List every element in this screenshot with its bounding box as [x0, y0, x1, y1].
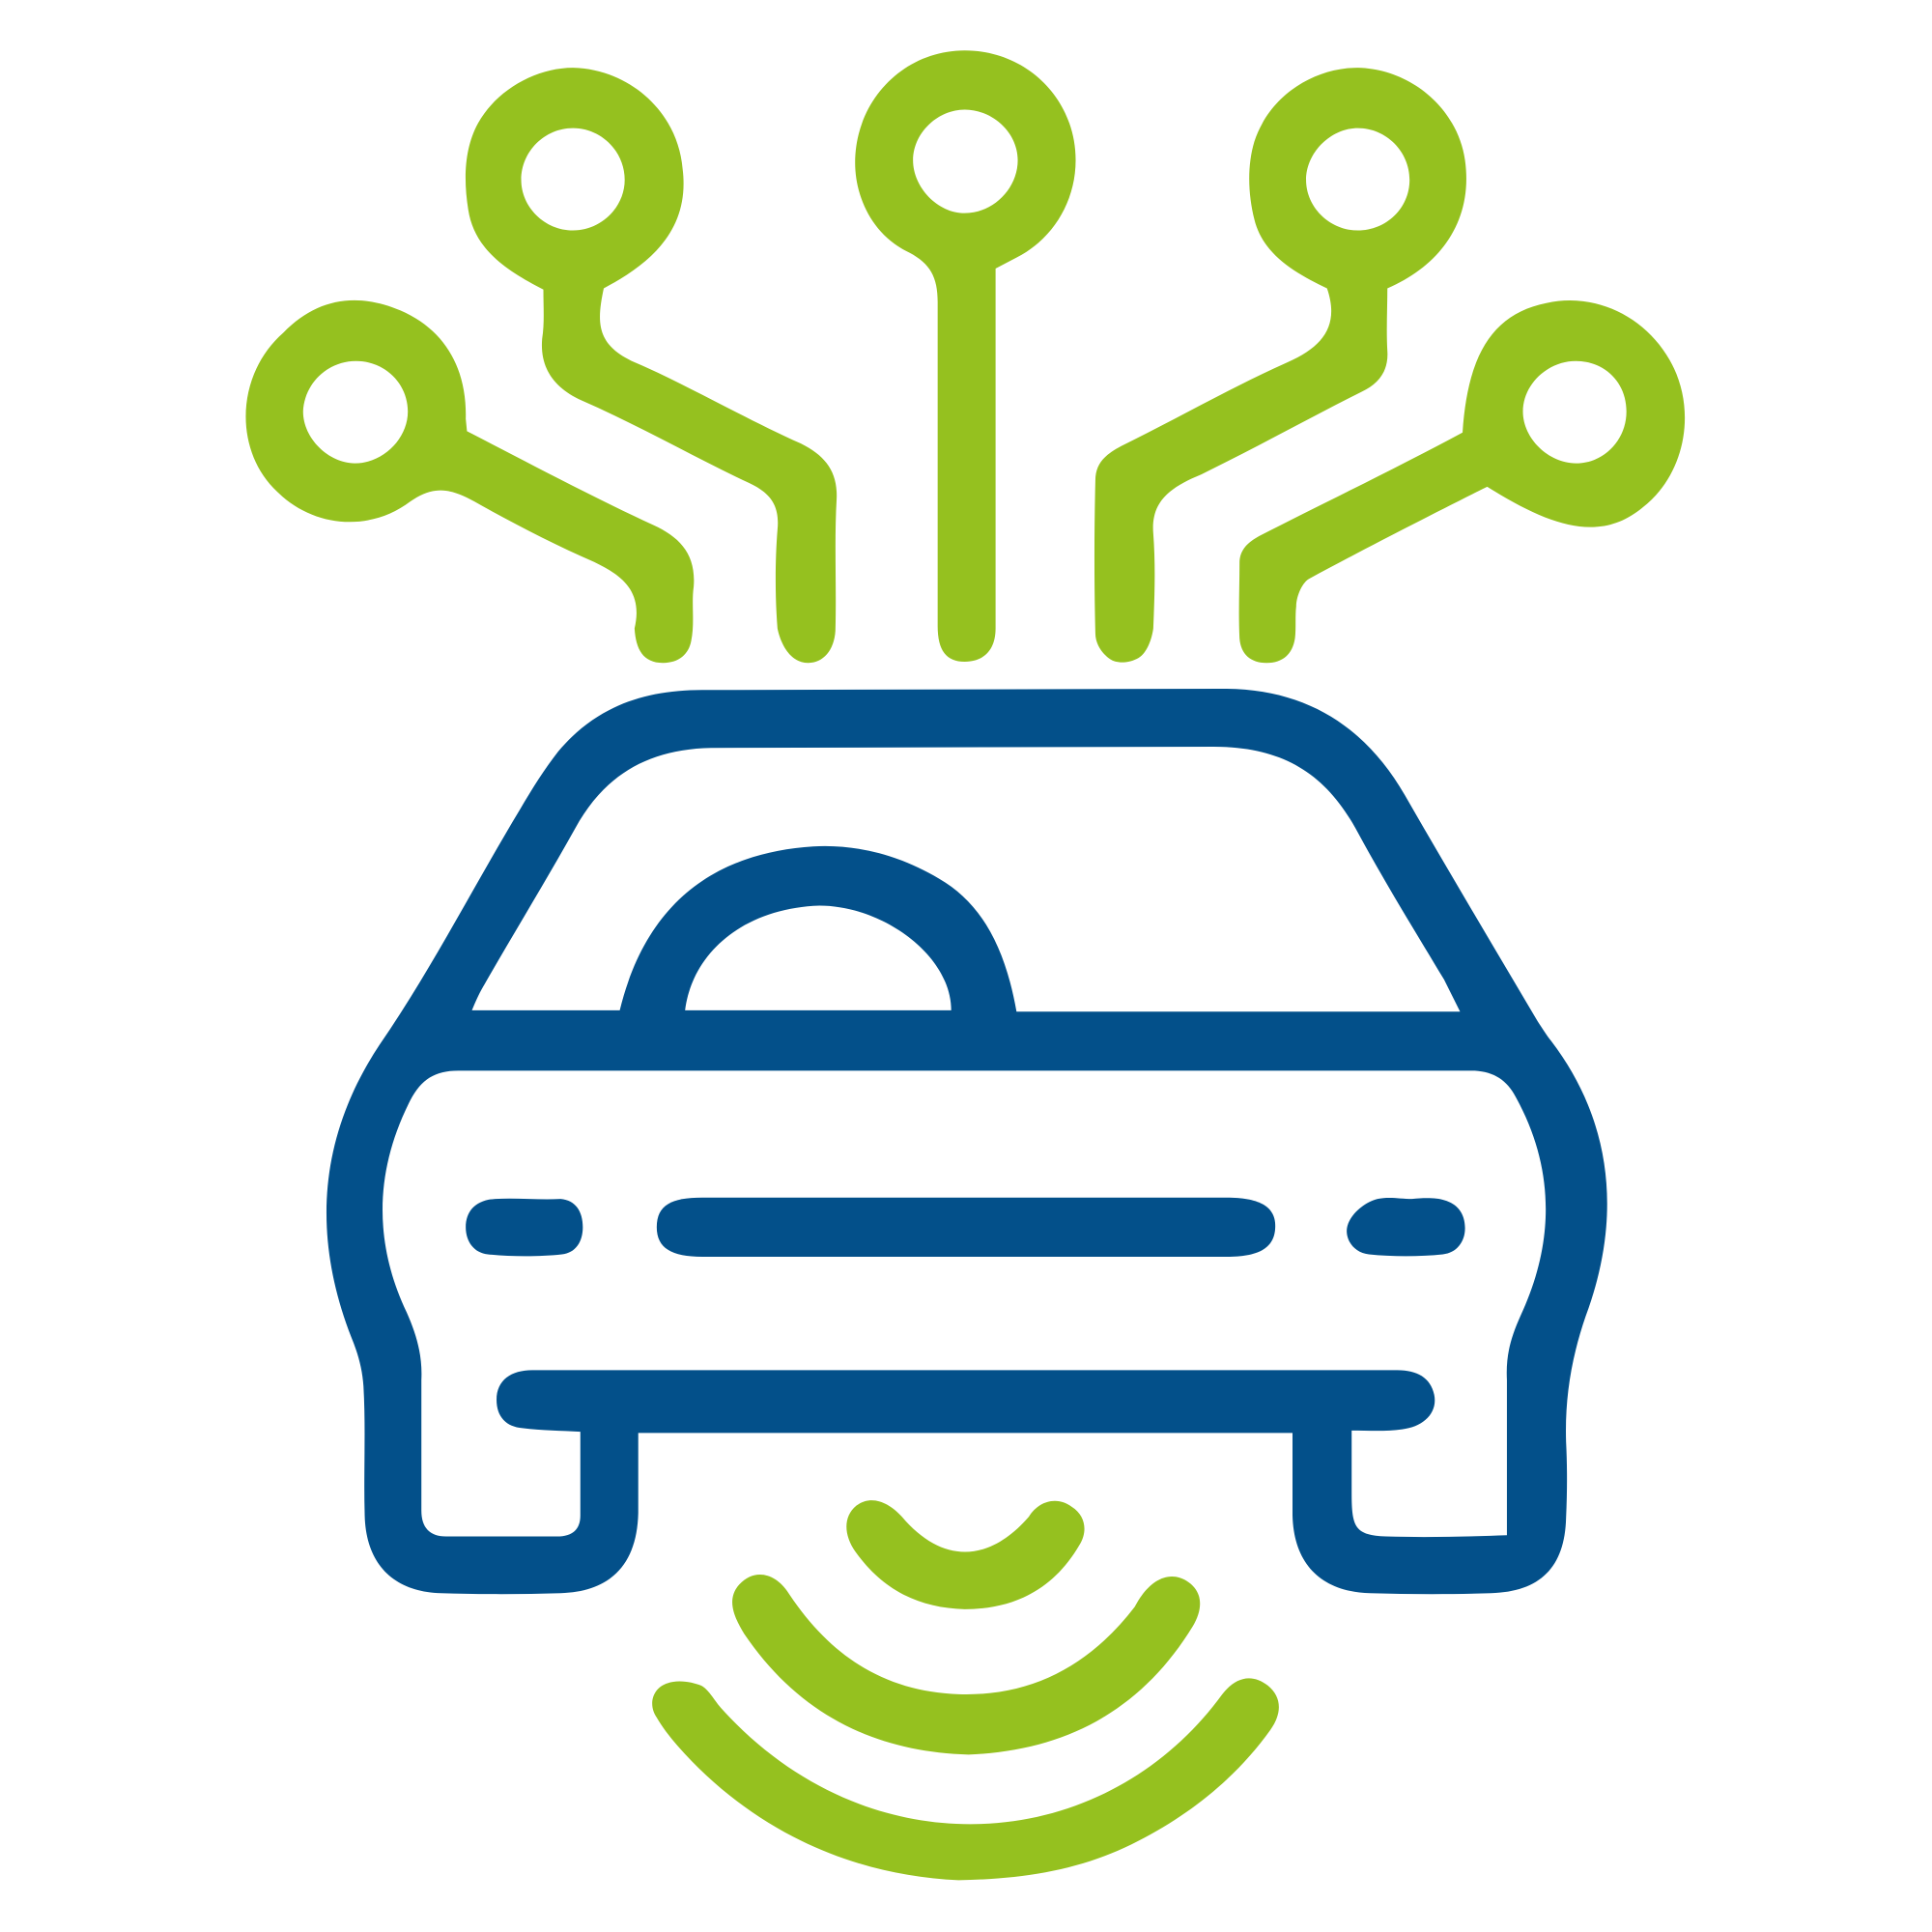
left headlight [466, 1199, 582, 1256]
icon: sensor node far right [1239, 300, 1685, 663]
car grille bar [657, 1198, 1275, 1257]
icon: signal wave large [652, 1678, 1279, 1880]
icon: sensor node top right [1094, 68, 1466, 663]
icon: signal wave small [846, 1500, 1085, 1609]
icon: signal wave medium [732, 1575, 1200, 1754]
icon: car [327, 689, 1607, 1594]
car body [327, 689, 1607, 1594]
icon: sensor node top left [466, 68, 837, 663]
right headlight [1347, 1198, 1465, 1256]
icon: sensor node far left [245, 300, 694, 663]
icon: sensor node top centre [855, 50, 1076, 662]
